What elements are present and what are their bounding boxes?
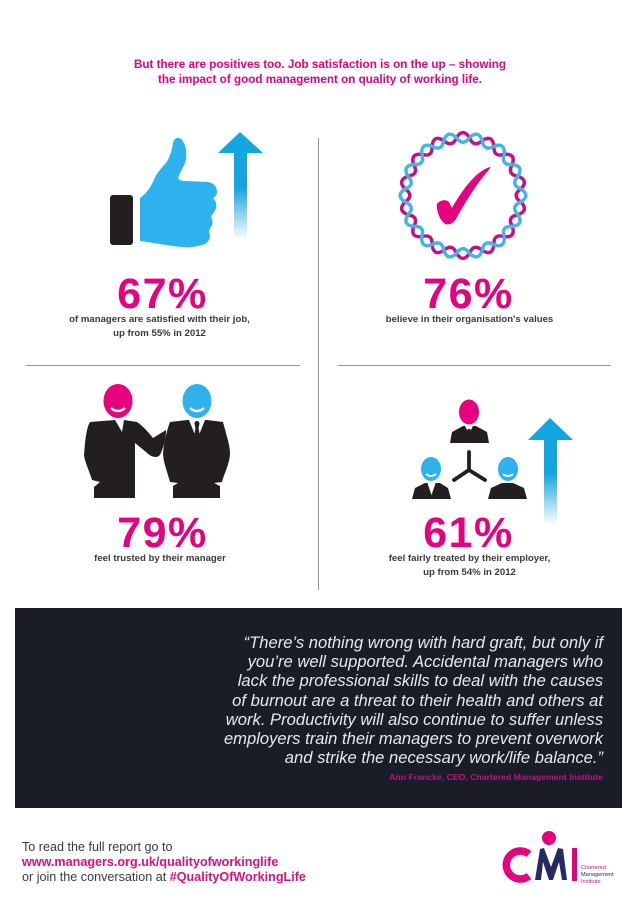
- icon: up arrow fair treatment: [528, 418, 573, 524]
- caption: job satisfaction: [69, 314, 250, 338]
- logo: CMI: [506, 831, 577, 881]
- logo text: Institute: [581, 879, 601, 885]
- quote text: employers train their managers to prevent overwork: [224, 729, 603, 748]
- quote text: you’re well supported. Accidental managers who: [248, 652, 603, 671]
- caption: fairly treated: up from 54% in 2012: [423, 566, 516, 578]
- footer text: or join the conversation at #QualityOfWorkingLife: [22, 870, 306, 884]
- caption: fairly treated: [388, 553, 550, 578]
- header text: the impact of good management on quality of working life.: [158, 73, 482, 86]
- logo text: [581, 865, 614, 885]
- caption: fairly treated: feel fairly treated by their employer,: [389, 553, 550, 564]
- caption: job satisfaction: up from 55% in 2012: [113, 328, 206, 338]
- icon: up arrow satisfaction: [218, 132, 263, 239]
- quote attribution: Ann Francke, CEO, Chartered Management Institute: [389, 772, 603, 782]
- icon: team structure: [412, 400, 527, 499]
- logo text: Chartered: [581, 865, 606, 871]
- icon: check badge: [389, 121, 537, 270]
- header text: [134, 58, 506, 86]
- logo text: Management: [581, 872, 614, 878]
- quote text: and strike the necessary work/life balance.”: [285, 748, 603, 767]
- quote text: of burnout are a threat to their health and others at: [232, 691, 603, 710]
- panel: quote background: [15, 608, 622, 808]
- stat: 79%: 79%: [117, 509, 208, 557]
- quote text: lack the professional skills to deal with the causes: [238, 671, 603, 690]
- caption: trusted: feel trusted by their manager: [94, 553, 226, 564]
- stat: 76%: 76%: [423, 270, 514, 318]
- caption: organisation values: believe in their organisation's values: [386, 314, 553, 325]
- header text: But there are positives too. Job satisfaction is on the up – showing: [134, 58, 506, 71]
- footer text: [22, 840, 306, 884]
- stat: 61%: 61%: [423, 509, 514, 557]
- caption: job satisfaction: of managers are satisfied with their job,: [69, 314, 250, 325]
- quote text: work. Productivity will also continue to suffer unless: [226, 710, 603, 729]
- icon: two businessmen: [84, 384, 230, 498]
- icon: thumbs up: [110, 138, 217, 247]
- footer text: To read the full report go to: [22, 840, 173, 854]
- quote text: [224, 633, 604, 767]
- stat: 67%: 67%: [117, 270, 208, 318]
- quote text: “There’s nothing wrong with hard graft, but only if: [244, 633, 603, 652]
- footer text: www.managers.org.uk/qualityofworkinglife: [22, 855, 278, 869]
